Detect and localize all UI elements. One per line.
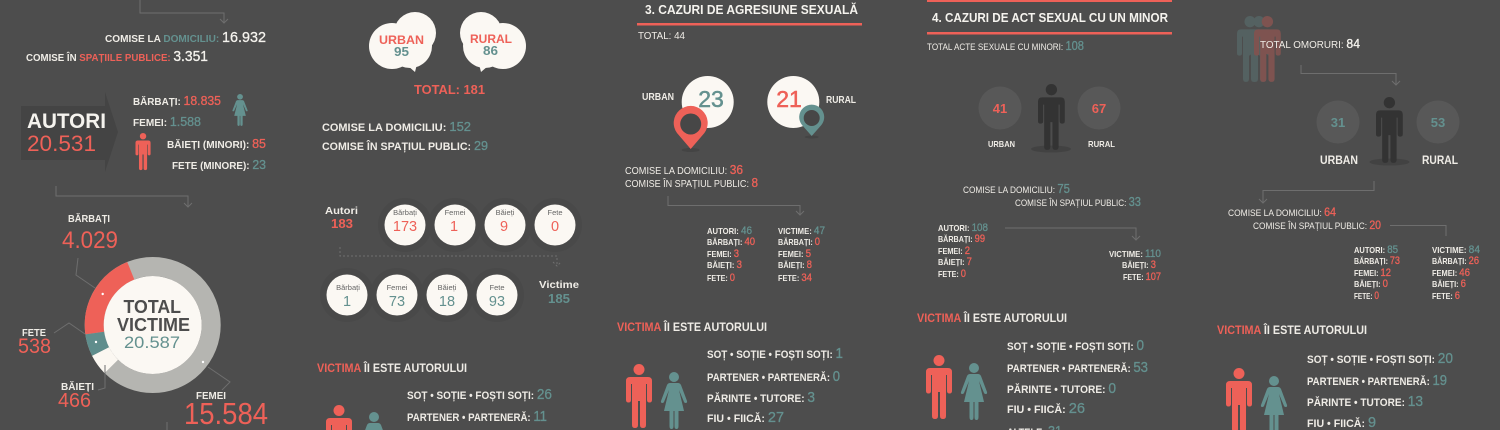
table: authors	[707, 225, 755, 284]
label: victims: Victime	[539, 279, 579, 291]
chart: victims donut: VICTIME	[117, 315, 190, 335]
icon: urban speech bubble	[369, 12, 436, 72]
list: relations: FIU • FIICĂ: 27	[707, 409, 784, 426]
icon: woman	[961, 363, 987, 420]
marker: rural 21	[767, 76, 824, 138]
row: victims circles: 18	[439, 294, 455, 310]
list: relations: PĂRINTE • TUTORE: 0	[1007, 380, 1116, 397]
table: victims: BĂIEȚI: 3	[1122, 259, 1156, 271]
table: victims: FEMEI: 5	[778, 248, 811, 260]
row: victims circles: 1	[343, 294, 351, 310]
list: relations: PARTENER • PARTENERĂ: 53	[1007, 359, 1148, 376]
text: committed at home: COMISE LA DOMICILIU: 152	[322, 119, 471, 134]
text: committed in public: COMISE ÎN SPAȚIUL PUBLIC: 33	[1015, 194, 1141, 209]
label: authors	[325, 205, 358, 231]
table: authors: FEMEI: 3	[707, 248, 739, 260]
row: authors circles	[378, 198, 582, 252]
list: relations: SOȚ • SOȚIE • FOȘTI SOȚI: 1	[707, 345, 843, 362]
icon: urban speech bubble: 95	[394, 44, 409, 59]
chart: urban and rural figure: 41	[993, 101, 1007, 116]
text: committed at home: COMISE LA DOMICILIU: 16.932	[105, 29, 266, 46]
label: victims	[539, 279, 579, 306]
table: victims: BĂIEȚI: 8	[778, 259, 812, 271]
icon: woman	[232, 94, 248, 126]
chart: victims donut	[94, 266, 211, 384]
icon: woman	[361, 412, 387, 430]
text: committed in public: COMISE ÎN SPAȚIUL PUBLIC: 29	[322, 138, 488, 153]
list: relations	[407, 386, 552, 425]
heading: victim relation: VICTIMA ÎI ESTE AUTORULUI	[617, 321, 767, 334]
list: relations: PARTENER • PARTENERĂ: 11	[407, 408, 547, 425]
list: relations: SOȚ • SOȚIE • FOȘTI SOȚI: 0	[1007, 337, 1144, 354]
panel: sexual assault cases	[617, 2, 862, 429]
chart: urban and rural figure: 67	[1092, 101, 1106, 116]
label: men victims	[62, 212, 118, 254]
table: authors: BĂIEȚI: 7	[938, 256, 972, 268]
table: victims	[778, 225, 825, 284]
table: authors: BĂRBAȚI: 99	[938, 233, 985, 245]
table: authors: AUTORI: 108	[938, 222, 988, 234]
table: authors	[938, 222, 988, 280]
row: authors circles: 173	[393, 219, 417, 235]
panel: homicides	[1217, 16, 1480, 430]
list: relations: PARTENER • PARTENERĂ: 19	[1307, 372, 1447, 389]
text: committed in public spaces: COMISE ÎN SPAȚIILE PUBLICE: 3.351	[26, 48, 208, 65]
row: victims circles: Bărbați	[336, 283, 360, 292]
row: victims circles: 93	[489, 294, 505, 310]
row: victims circles: Femei	[387, 283, 408, 292]
icon: woman	[661, 372, 687, 429]
label: rural: RURAL	[826, 95, 856, 106]
marker: urban 23	[674, 76, 734, 152]
text: total: TOTAL: 181	[414, 82, 485, 97]
label: women victims: FEMEI	[196, 390, 226, 402]
row: victims circles: 73	[389, 294, 405, 310]
table: victims: FETE: 6	[1432, 290, 1460, 302]
list: relations: PARTENER • PARTENERĂ: 0	[707, 368, 840, 385]
label: girl victims: FETE	[22, 327, 46, 339]
icon: rural speech bubble: RURAL	[470, 34, 512, 46]
list: relations	[1307, 350, 1453, 430]
list: relations: PĂRINTE • TUTORE: 13	[1307, 393, 1423, 410]
table: authors: BĂRBAȚI: 73	[1354, 255, 1400, 267]
icon: urban speech bubble: URBAN	[379, 35, 424, 47]
text: boy authors: BĂIEȚI (MINORI): 85	[167, 136, 266, 151]
text: committed in public: COMISE ÎN SPAȚIUL PUBLIC: 8	[625, 175, 758, 190]
table: victims: VICTIME: 84	[1432, 244, 1480, 256]
icon: rural speech bubble: 86	[483, 43, 498, 58]
text: women authors: FEMEI: 1.588	[133, 114, 201, 129]
marker: rural 21: 21	[776, 86, 802, 112]
panel: rape cases	[317, 12, 582, 430]
chart: urban and rural figure	[978, 84, 1120, 152]
text: committed at home: COMISE LA DOMICILIU: 36	[625, 162, 743, 177]
table: authors: BĂIEȚI: 0	[1354, 278, 1388, 290]
row: authors circles: 0	[551, 219, 559, 235]
callout: authors arrow: AUTORI	[27, 110, 106, 133]
panel: sex with a minor	[917, 0, 1172, 430]
text: total: TOTAL ACTE SEXUALE CU MINORI: 108	[927, 38, 1084, 53]
label: men victims: 4.029	[62, 227, 118, 254]
row: authors circles: Femei	[445, 208, 466, 217]
table: victims: FETE: 34	[778, 272, 812, 284]
row: authors circles: Băieți	[496, 208, 515, 217]
icon: man	[136, 133, 151, 170]
table: authors	[1354, 244, 1400, 302]
icon: man	[926, 355, 952, 419]
chart: urban and rural figure	[1316, 97, 1460, 167]
label: boy victims	[58, 380, 94, 412]
icon: rural speech bubble	[460, 12, 526, 72]
table: victims	[1432, 244, 1480, 302]
heading: victim relation: VICTIMA ÎI ESTE AUTORULUI	[917, 312, 1067, 325]
row: authors circles: 9	[500, 219, 508, 235]
chart: urban and rural figure: URBAN	[1320, 155, 1358, 167]
table: authors: FETE: 0	[1354, 290, 1379, 302]
heading: victim relation: VICTIMA ÎI ESTE AUTORULUI	[317, 362, 467, 375]
panel: overview totals	[18, 0, 268, 430]
chart: urban and rural figure: RURAL	[1088, 139, 1115, 149]
list: relations: FIU • FIICĂ: 26	[1007, 400, 1085, 417]
table: authors: BĂIEȚI: 3	[707, 259, 742, 271]
chart: victims donut: 20.587	[124, 333, 180, 352]
heading: 3. CAZURI DE AGRESIUNE SEXUALĂ	[645, 2, 859, 17]
table: authors: FEMEI: 2	[938, 245, 970, 257]
label: victims: 185	[548, 292, 570, 306]
chart: urban and rural figure: RURAL	[1422, 155, 1458, 167]
label: authors: 183	[331, 217, 353, 231]
icon: man	[626, 364, 652, 428]
chart: urban and rural figure: URBAN	[988, 139, 1015, 149]
chart: victims donut: TOTAL	[124, 297, 181, 317]
text: total: TOTAL: 44	[638, 31, 685, 42]
list: relations: SOȚ • SOȚIE • FOȘTI SOȚI: 26	[407, 386, 552, 403]
table: victims	[1109, 248, 1161, 283]
label: women victims: 15.584	[184, 396, 268, 430]
table: victims: BĂIEȚI: 6	[1432, 278, 1466, 290]
label: authors: Autori	[325, 205, 358, 217]
table: authors: FEMEI: 12	[1354, 267, 1391, 279]
chart: urban and rural figure: 31	[1331, 115, 1345, 130]
table: victims: BĂRBAȚI: 0	[778, 236, 820, 248]
label: girl victims: 538	[18, 335, 51, 358]
icon: ghost figures	[1237, 16, 1281, 82]
table: victims: VICTIME: 47	[778, 225, 825, 237]
icon: man	[326, 405, 352, 430]
table: authors: AUTORI: 46	[707, 225, 752, 237]
list: relations: PĂRINTE • TUTORE: 3	[707, 389, 815, 406]
label: urban: URBAN	[642, 92, 674, 103]
table: victims: FETE: 107	[1123, 271, 1161, 283]
table: victims: FEMEI: 46	[1432, 267, 1470, 279]
row: victims circles: Fete	[489, 283, 505, 292]
icon: man	[1226, 368, 1252, 430]
row: authors circles: Fete	[547, 208, 563, 217]
callout: authors arrow	[21, 92, 118, 172]
label: boy victims: 466	[58, 390, 91, 412]
text: committed at home: COMISE LA DOMICILIU: 75	[963, 181, 1070, 196]
heading: 4. CAZURI DE ACT SEXUAL CU UN MINOR	[932, 11, 1168, 25]
table: victims: VICTIME: 110	[1109, 248, 1161, 260]
text: committed in public: COMISE ÎN SPAȚIUL PUBLIC: 20	[1253, 218, 1381, 232]
table: authors: AUTORI: 85	[1354, 244, 1398, 256]
chart: urban and rural figure: 53	[1431, 115, 1445, 130]
text: total homicides: TOTAL OMORURI: 84	[1260, 36, 1360, 51]
icon: woman	[1261, 376, 1287, 430]
row: authors circles: Bărbați	[393, 208, 417, 217]
row: authors circles: 1	[450, 219, 458, 235]
list: relations: SOȚ • SOȚIE • FOȘTI SOȚI: 20	[1307, 350, 1453, 367]
label: boy victims: BĂIEȚI	[61, 380, 94, 393]
table: victims: BĂRBAȚI: 26	[1432, 255, 1479, 267]
list: relations	[707, 345, 843, 426]
table: authors: FETE: 0	[938, 268, 966, 280]
text: girl authors: FETE (MINORE): 23	[172, 157, 266, 172]
text: committed at home: COMISE LA DOMICILIU: 64	[1228, 205, 1336, 219]
table: authors: BĂRBAȚI: 40	[707, 236, 755, 248]
list: relations	[1007, 337, 1148, 430]
text: men authors: BĂRBAȚI: 18.835	[133, 93, 221, 108]
row: victims circles: Băieți	[438, 283, 457, 292]
table: authors: FETE: 0	[707, 272, 735, 284]
label: men victims: BĂRBAȚI	[68, 212, 110, 225]
row: victims circles	[320, 268, 524, 322]
heading: victim relation: VICTIMA ÎI ESTE AUTORULUI	[1217, 324, 1367, 337]
marker: urban 23: 23	[698, 86, 724, 112]
callout: authors arrow: 20.531	[27, 131, 96, 156]
